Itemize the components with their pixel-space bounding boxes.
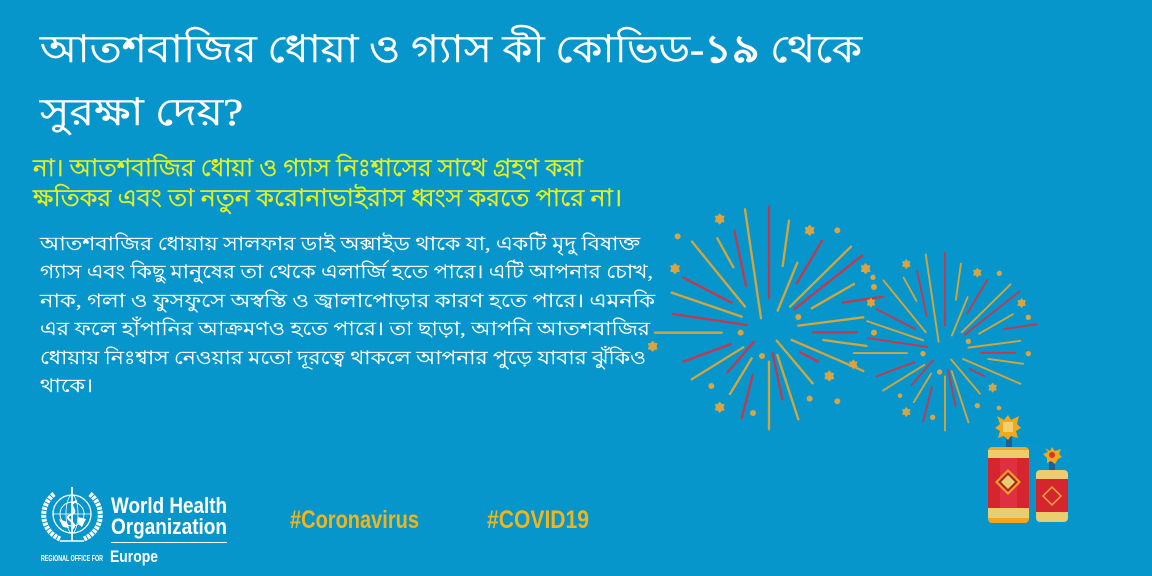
body text: গ্যাস এবং কিছু মানুষের তা থেকে এলার্জি হতে পারে। এটি আপনার চোখ,: [40, 260, 653, 283]
answer text: ক্ষতিকর এবং তা নতুন করোনাভাইরাস ধ্বংস করতে পারে না।: [32, 184, 622, 213]
body text: থাকে।: [40, 376, 93, 397]
logo: World Health Organization Europe: [41, 487, 227, 566]
title: আতশবাজির ধোয়া ও গ্যাস কী কোভিড- ১৯ থেকে: [39, 25, 864, 71]
answer text: না। আতশবাজির ধোয়া ও গ্যাস নিঃশ্বাসের সাথে গ্রহণ করা: [32, 154, 584, 182]
body text: আতশবাজির ধোয়ায় সালফার ডাই অক্সাইড থাকে যা, একটি মৃদু বিষাক্ত: [39, 232, 641, 255]
organization name: Organization: [111, 514, 227, 539]
large firework burst: [655, 207, 883, 429]
answer text: [32, 154, 622, 213]
title: [39, 25, 864, 136]
organization name: World Health: [111, 493, 227, 518]
body text: ধোয়ায় নিঃশ্বাস নেওয়ার মতো দূরত্বে থাকলে আপনার পুড়ে যাবার ঝুঁকিও: [40, 346, 646, 369]
icon: small firecracker: [1036, 447, 1068, 522]
icon: fireworks: [648, 207, 1036, 430]
title: সুরক্ষা দেয়?: [39, 92, 243, 136]
organization name: [111, 493, 227, 539]
firework stars: [648, 214, 1025, 416]
body text: নাক, গলা ও ফুসফুসে অস্বস্তি ও জ্বালাপোড়ার কারণ হতে পারে। এমনকি: [39, 290, 656, 312]
body text: [39, 232, 656, 397]
hashtag: Coronavirus: #Coronavirus: [290, 506, 419, 534]
hashtag: COVID19: #COVID19: [487, 506, 589, 534]
icon: large firecracker: [988, 415, 1029, 523]
regional office: REGIONAL OFFICE FOR: [41, 553, 103, 563]
icon: WHO emblem: [44, 487, 100, 541]
body text: এর ফলে হাঁপানির আক্রমণও হতে পারে। তা ছাড়া, আপনি আতশবাজির: [40, 317, 651, 340]
small firework burst: [854, 252, 1036, 430]
firework dots: [675, 227, 1031, 420]
logo: World Health Organization Europe: Europe: [110, 547, 158, 566]
